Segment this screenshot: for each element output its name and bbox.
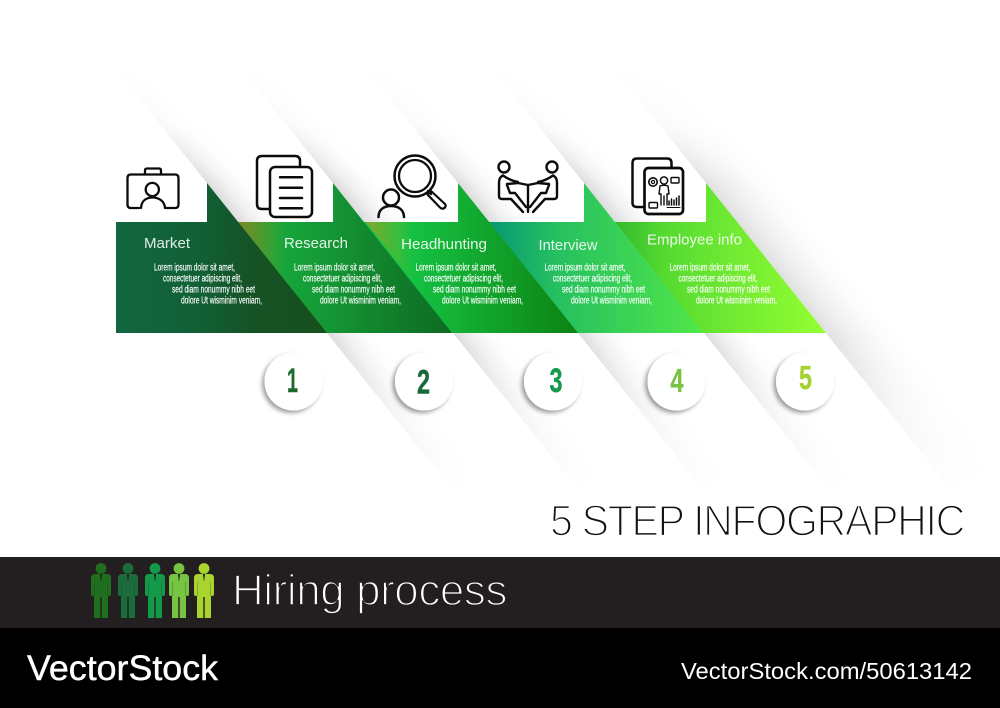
body text: step 1: sed diam nonummy nibh eet [172,284,255,296]
body text: step 2: sed diam nonummy nibh eet [312,284,395,296]
body text: step 3: Lorem ipsum dolor sit amet, [416,262,496,274]
page background [0,0,1000,557]
body text: step 4: consectetuer adipiscing elit, [553,274,632,284]
body text: step 4: Lorem ipsum dolor sit amet, [544,262,626,274]
icon: briefcase with person [128,168,178,208]
body text: step 5: consectetuer adipiscing elit, [678,274,758,284]
body text: step 1: Lorem ipsum dolor sit amet, [154,262,235,274]
body text: step 2: Lorem ipsum dolor sit amet, [294,262,375,274]
person 5 [194,563,214,618]
body text: step 4: sed diam nonummy nibh eet [562,284,645,296]
watermark footer [0,628,1000,708]
green ribbon with five overlapping steps [116,183,826,333]
body text: step 3: dolore Ut wisminim veniam, [442,296,523,306]
body text: step 5: dolore Ut wisminim veniam, [696,296,777,306]
number badge 3 [524,352,582,410]
step titles [144,232,742,254]
icon: row of five people [91,563,214,618]
body text: step 5: Lorem ipsum dolor sit amet, [670,262,750,274]
body text: step 4: dolore Ut wisminim veniam, [571,296,652,306]
title: Headhunting: Headhunting [401,236,487,253]
body text: step 4 [544,262,652,306]
body text: step 3: consectetuer adipiscing elit, [424,274,503,284]
icon: two people at a table [498,162,558,212]
number badge 3: 3 [550,362,562,400]
ribbon step 4 [480,183,703,333]
icon: stacked documents [257,156,312,217]
number badge 4: 4 [670,362,684,399]
title: Employee info: Employee info [647,232,742,248]
body text: step 3 [416,262,523,306]
person 2 [118,563,138,618]
diagonal shadow bands [166,130,898,430]
body text: step 2: dolore Ut wisminim veniam, [320,296,401,306]
number badge 1: 1 [287,362,298,400]
title: Market: Market [144,235,191,252]
person 3 [145,563,165,618]
number badge 5 [776,352,834,410]
body text: step 5: sed diam nonummy nibh eet [687,284,770,296]
body text: step 5 [670,262,777,306]
icon: magnifier over person [378,156,446,217]
ribbon step 2 [225,183,452,333]
heading: 5 STEP INFOGRAPHIC: 5 STEP INFOGRAPHIC [550,496,965,546]
title: Research: Research [284,235,348,252]
number badge 1 [264,352,322,410]
body text: step 1: consectetuer adipiscing elit, [163,274,242,284]
dark title band [0,557,1000,628]
body text: step 2: consectetuer adipiscing elit, [303,274,382,284]
body text: step 2 [294,262,401,306]
person 1 [91,563,111,618]
number badge 5: 5 [799,359,812,396]
number badge 4 [648,352,706,410]
number badge 2: 2 [417,364,430,402]
ribbon step 1 [116,183,327,333]
heading: Hiring process: Hiring process [232,566,507,615]
body text: step 1 [154,262,262,306]
title: Interview: Interview [538,237,598,254]
footer url text: VectorStock.com/50613142 [681,658,972,684]
body text: step 3: sed diam nonummy nibh eet [433,284,516,296]
number badge 2 [395,352,453,410]
ribbon step 5 [600,183,826,333]
icon: employee info documents [632,158,683,214]
ribbon step 3 [350,183,578,333]
person 4 [169,563,189,618]
body text: step 1: dolore Ut wisminim veniam, [181,296,262,306]
footer logo text: VectorStock [27,649,219,688]
